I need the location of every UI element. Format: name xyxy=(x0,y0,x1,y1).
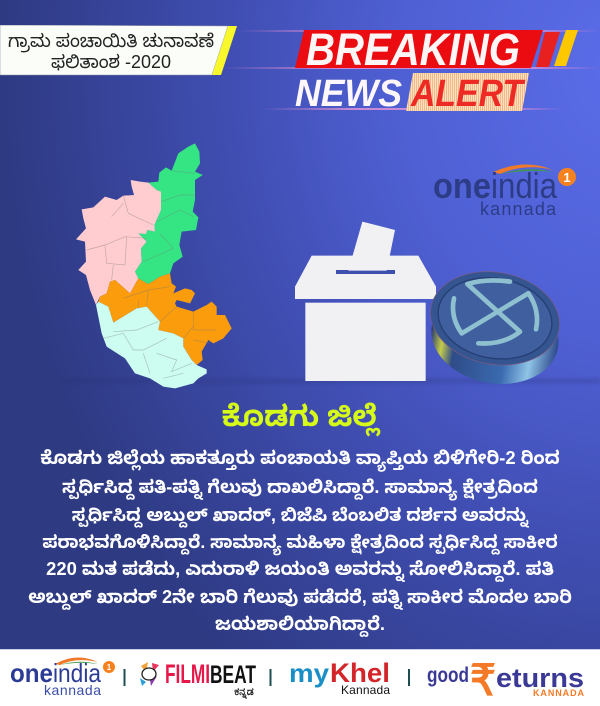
logo: oneindia kannada: india xyxy=(53,658,101,688)
logo: oneindia kannada xyxy=(10,657,115,698)
logo: goodreturns: eturns xyxy=(496,663,584,693)
ballot box and election symbol xyxy=(294,222,560,384)
logo: mykhel xyxy=(289,658,390,697)
logo: mykhel: Kannada xyxy=(341,683,390,697)
header banner: election results xyxy=(0,25,237,76)
body text: ಸ್ಪರ್ಧಿಸಿದ್ದ ಪತಿ-ಪತ್ನಿ ಗೆಲುವು ದಾಖಲಿಸಿದ್ದಾರೆ. ಸಾಮಾನ್ಯ ಕ್ಷೇತ್ರದಿಂದ xyxy=(62,477,538,497)
body text: ಅಬ್ದುಲ್ ಖಾದರ್ 2ನೇ ಬಾರಿ ಗೆಲುವು ಪಡೆದರೆ, ಪತ್ನಿ ಸಾಕೀರ ಮೊದಲ ಬಾರಿ xyxy=(28,587,572,607)
oneindia kannada logo: kannada xyxy=(480,199,557,219)
logo: filmibeat: ಕನ್ನಡ xyxy=(234,686,254,699)
region: central south, orange xyxy=(98,273,232,365)
logo: mykhel: Khel xyxy=(330,658,390,688)
logo: goodreturns: good xyxy=(427,664,469,687)
body text: ಸ್ಪರ್ಧಿಸಿದ್ದ ಅಬ್ದುಲ್ ಖಾದರ್, ಬಿಜೆಪಿ ಬೆಂಬಲಿತ ದರ್ಶನ ಅವರನ್ನು xyxy=(72,505,528,525)
election symbol coin xyxy=(423,262,567,394)
district heading: ಕೊಡಗು ಜಿಲ್ಲೆ xyxy=(222,401,378,433)
logo: filmibeat: FILMI xyxy=(165,659,210,689)
breaking news alert badge: NEWS xyxy=(295,73,402,115)
region: south, mint xyxy=(96,302,207,388)
logo: goodreturns: ₹ xyxy=(470,657,496,705)
floor shadow xyxy=(60,379,600,383)
breaking news alert badge: ALERT xyxy=(410,73,525,115)
body text xyxy=(28,447,572,637)
oneindia kannada logo xyxy=(433,164,576,219)
oneindia kannada logo: 1 xyxy=(563,170,571,185)
logo: mykhel: my xyxy=(289,658,330,688)
breaking news alert badge: BREAKING xyxy=(306,24,520,75)
header banner: election results: ಫಲಿತಾಂಶ -2020 xyxy=(51,52,171,72)
region: north east, green xyxy=(135,143,203,284)
karnataka map xyxy=(76,143,232,388)
logo: goodreturns xyxy=(427,657,584,705)
oneindia kannada logo: india xyxy=(491,165,558,206)
region: north west, pink xyxy=(76,180,161,305)
logo: goodreturns: KANNADA xyxy=(533,688,584,698)
ballot slot xyxy=(336,270,395,274)
body text: 220 ಮತ ಪಡೆದು, ಎದುರಾಳಿ ಜಯಂತಿ ಅವರನ್ನು ಸೋಲಿಸಿದ್ದಾರೆ. ಪತಿ xyxy=(46,558,554,579)
box lid xyxy=(295,256,436,299)
logo: oneindia kannada: one xyxy=(10,658,53,688)
logo: filmibeat xyxy=(140,659,256,699)
logo: oneindia kannada: 1 xyxy=(107,663,112,672)
header banner: election results: ಗ್ರಾಮ ಪಂಚಾಯಿತಿ ಚುನಾವಣೆ xyxy=(8,31,214,51)
logo: filmibeat: BEAT xyxy=(210,661,256,689)
ballot paper xyxy=(348,222,395,271)
box body xyxy=(305,303,426,381)
breaking news alert badge xyxy=(229,24,594,115)
footer logo strip xyxy=(0,649,600,706)
body text: ಪರಾಭವಗೊಳಿಸಿದ್ದಾರೆ. ಸಾಮಾನ್ಯ ಮಹಿಳಾ ಕ್ಷೇತ್ರದಿಂದ ಸ್ಪರ್ಧಿಸಿದ್ದ ಸಾಕೀರ xyxy=(42,532,558,552)
oneindia kannada logo: one xyxy=(433,165,491,206)
body text: ಜಯಶಾಲಿಯಾಗಿದ್ದಾರೆ. xyxy=(215,613,385,634)
body text: ಕೊಡಗು ಜಿಲ್ಲೆಯ ಹಾಕತ್ತೂರು ಪಂಚಾಯತಿ ವ್ಯಾಪ್ತಿಯ ಬಿಳಿಗೇರಿ-2 ರಿಂದ xyxy=(40,447,560,468)
logo: oneindia kannada: kannada xyxy=(44,682,101,698)
